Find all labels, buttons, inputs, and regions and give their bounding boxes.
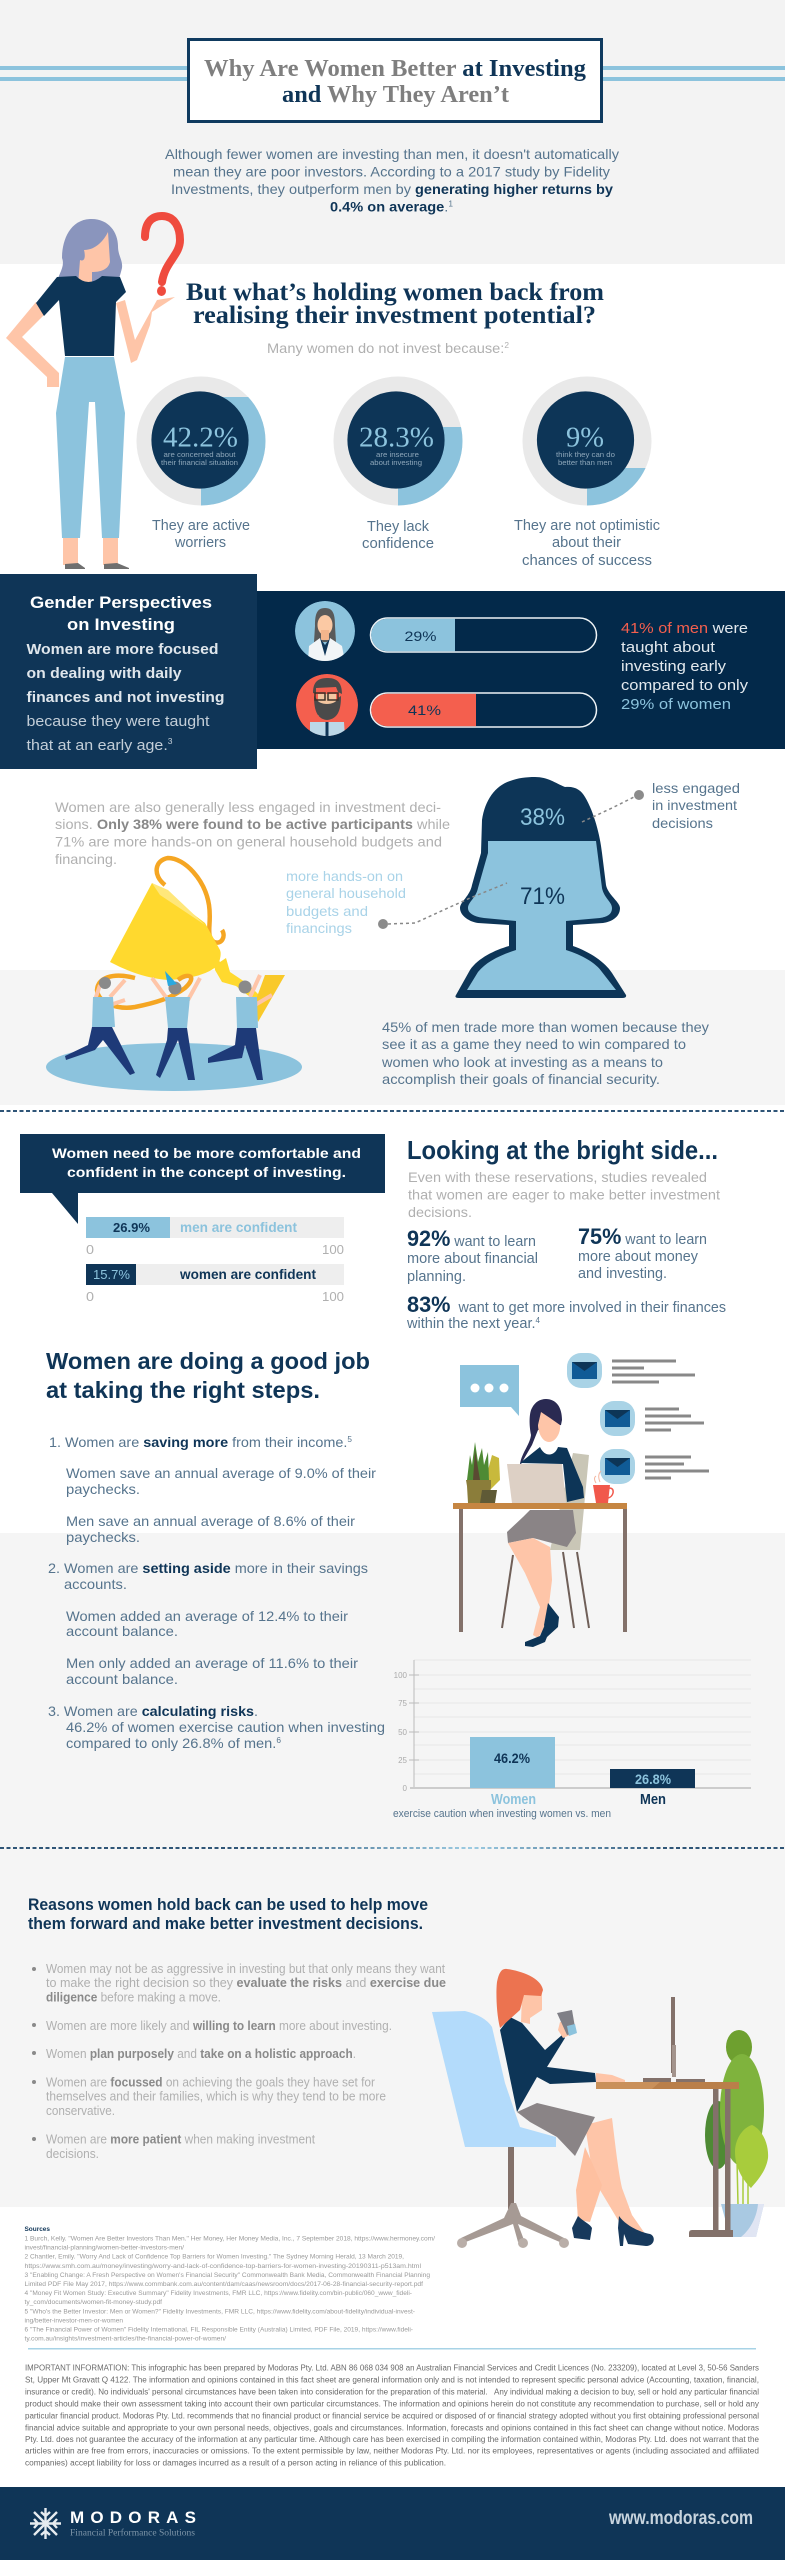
sources: 5 "Who's the Better Investor: Men or Women?" Fidelity Investments, FMR LLC, https://www.fidelity.com/about-fidelity/individual-invest- bbox=[24, 2308, 415, 2316]
important information: insurance or credit). No individuals' personal circumstances have been taken into consideration for the preparation of this material. Any individual making a decision to buy, sell or hold any particular financial bbox=[25, 2388, 759, 2396]
illustration: people carrying trophy bbox=[46, 858, 302, 1091]
bullet list: Women are more patient when making investment bbox=[46, 2132, 315, 2146]
donut: 28.3%: 28.3% bbox=[359, 422, 434, 454]
bullet list: conservative. bbox=[46, 2103, 115, 2118]
sources: Sources bbox=[24, 2226, 50, 2233]
text: men trade more: see it as a game they need to win compared to bbox=[382, 1036, 686, 1052]
text box: 3 bbox=[168, 737, 173, 746]
donut: 9% bbox=[522, 376, 652, 506]
step 1: paychecks. bbox=[66, 1481, 140, 1497]
callout: more hands-on: budgets and bbox=[286, 903, 368, 919]
shirt bbox=[36, 276, 126, 356]
donut: 28.3%: are insecure bbox=[376, 450, 419, 459]
decorative title rules bbox=[0, 66, 785, 81]
text box: finances and not investing bbox=[26, 689, 224, 706]
trousers bbox=[56, 357, 125, 538]
chart: exercise caution bbox=[393, 1660, 751, 1820]
donut: 28.3% bbox=[334, 376, 462, 506]
text: men trade more bbox=[381, 1019, 709, 1087]
intro paragraph: mean they are poor investors. According to a 2017 study by Fidelity bbox=[173, 164, 610, 180]
step 2: account balance. bbox=[66, 1623, 178, 1639]
intro paragraph bbox=[165, 146, 619, 214]
step 2: Women added an average of 12.4% to their bbox=[66, 1608, 348, 1624]
text box bbox=[0, 574, 257, 769]
callout: more hands-on: more hands-on on bbox=[286, 868, 403, 884]
intro paragraph: 0.4% on average . bbox=[330, 198, 448, 214]
step 1: paychecks. bbox=[66, 1529, 140, 1545]
face bbox=[78, 232, 110, 289]
step 1: 1. Women are saving more from their income. bbox=[49, 1434, 344, 1450]
callout bbox=[20, 1134, 385, 1224]
heading: But what’s holding women back from bbox=[186, 279, 604, 306]
chart: exercise caution: 25 bbox=[398, 1756, 408, 1765]
sources: 4 "Money Fit Women Study: Executive Summary" Fidelity Investments, FMR LLC, https://www.fidelity.com/bin-public/060_www_fideli- bbox=[24, 2290, 412, 2297]
chart: head silhouette: 71% bbox=[520, 883, 565, 910]
laptop bbox=[507, 1464, 566, 1503]
monitor bbox=[643, 1997, 705, 2082]
stat: 92%: more about financial bbox=[407, 1251, 538, 1267]
desk bbox=[453, 1503, 627, 1632]
important information: IMPORTANT INFORMATION: This infographic has been prepared by Modoras Pty. Ltd. ABN 86 068 034 908 an Australian Financial Services and Credit Licences (No. 233209), located at Level 3, 50-56 Sanders bbox=[25, 2364, 759, 2372]
icon: Modoras logo mark bbox=[30, 2508, 61, 2539]
text box: Women are more focused bbox=[26, 641, 218, 658]
stat: 92% bbox=[407, 1226, 538, 1285]
chart: exercise caution: 0 bbox=[403, 1784, 408, 1793]
woman figure bbox=[507, 1399, 584, 1647]
chart: head silhouette bbox=[455, 777, 626, 998]
paragraph: financing. bbox=[55, 851, 117, 867]
callout text: compared to only bbox=[621, 677, 749, 694]
caption: not optimistic: chances of success bbox=[522, 552, 652, 569]
bar: women are confident: 100 bbox=[322, 1289, 344, 1304]
shoes bbox=[65, 563, 129, 569]
sources: https://www.smh.com.au/money/investing/worry-and-lack-of-confidence-top-barriers-for-women-investing-20190311-p513am.html bbox=[24, 2263, 422, 2270]
stat: 83% bbox=[406, 1292, 726, 1332]
legs bbox=[63, 535, 118, 565]
icon: man avatar bbox=[296, 674, 358, 737]
important information: financial advice suitable and appropriate to your own personal needs, objectives, goals and circumstances. Information, forecasts and opinions contained in this fact sheet can change without notice. Modoras bbox=[25, 2424, 759, 2432]
paragraph: Women are also generally less engaged in investment deci- bbox=[55, 799, 441, 815]
bullet list: diligence before making a move. bbox=[46, 1990, 221, 2004]
bullet list: Women may not be as aggressive in investing but that only means they want bbox=[46, 1961, 445, 1976]
subheading: 2 bbox=[504, 341, 510, 350]
heading: Women are doing a good job bbox=[46, 1348, 370, 1374]
stat: 75%: more about money bbox=[578, 1249, 699, 1265]
title box: Why Are Women Better at Investing bbox=[204, 56, 586, 82]
paragraph: 71% are more hands-on on general household budgets and bbox=[55, 834, 442, 850]
chart: exercise caution: 50 bbox=[398, 1728, 408, 1737]
icon: email two bbox=[600, 1401, 704, 1436]
intro paragraph: Although fewer women are investing than men, it doesn't automatically bbox=[165, 146, 619, 162]
bar: men: Men bbox=[640, 1791, 666, 1808]
hair bbox=[57, 219, 122, 286]
figure bbox=[496, 1969, 654, 2246]
panel: reasons women hold back bbox=[28, 1896, 446, 2161]
bullet list: themselves and their families, which is why they tend to be more bbox=[46, 2088, 386, 2104]
sources: ty_com/documents/women-fit-money-study.pdf bbox=[24, 2299, 162, 2306]
intro text: decisions. bbox=[408, 1204, 472, 1220]
step 1: 5 bbox=[347, 1435, 353, 1444]
bullet list: Women are focussed on achieving the goals they have set for bbox=[46, 2074, 376, 2090]
step 2: account balance. bbox=[66, 1671, 178, 1687]
heading: them forward and make better investment decisions. bbox=[28, 1915, 423, 1933]
bar: women are confident: 15.7% bbox=[93, 1267, 130, 1282]
progress bar: women 29% bbox=[370, 618, 596, 652]
stat: 75%: 75% want to learn bbox=[578, 1224, 707, 1249]
sources: Limited PDF File May 2017, https://www.commbank.com.au/content/dam/caas/newsroom/docs/2017-06-28-financial-security-report.pdf bbox=[24, 2281, 423, 2288]
donut: 42.2%: their financial situation bbox=[161, 458, 238, 467]
text box: Gender Perspectives bbox=[30, 593, 212, 612]
step 2: 2. Women are setting aside more in their savings bbox=[48, 1560, 368, 1576]
important information: Pty. Ltd. does not guarantee the accuracy of the information at any particular time. Although care has been exercised in compiling the information contained within, Modoras Pty. Ltd. does not warrant that the bbox=[25, 2435, 759, 2444]
bullet list: to make the right decision so they evaluate the risks and exercise due bbox=[46, 1975, 446, 1990]
bullet list bbox=[32, 1961, 446, 2161]
donut: 9%: better than men bbox=[558, 458, 612, 467]
panel: confidence bbox=[20, 1134, 385, 1304]
icon: woman avatar bbox=[295, 601, 355, 662]
bar: women are confident: women are confident bbox=[179, 1266, 316, 1282]
text box: that at an early age. bbox=[26, 737, 159, 754]
text: men trade more: accomplish their goals of financial security. bbox=[382, 1071, 660, 1087]
text box: on Investing bbox=[67, 615, 175, 634]
website: www.modoras.com bbox=[608, 2508, 753, 2529]
panel: right steps bbox=[46, 1348, 385, 1751]
important information: particular financial product. Modoras Pty. Ltd. recommends that no financial product or financial service be acquired or disposed of or financial strategy adopted without you first obtaining professional personal bbox=[25, 2412, 759, 2420]
important information bbox=[25, 2364, 759, 2468]
caption: active worriers bbox=[152, 517, 250, 551]
important information: St, Upper Mt Gravatt Q 4122. The information and opinions contained in this fact sheet are general information only and is not intended to represent specific personal advice (Accounting, taxation, financial, bbox=[25, 2376, 759, 2384]
icon: email three bbox=[600, 1449, 709, 1484]
text box: on dealing with daily bbox=[26, 665, 182, 682]
callout: less engaged: decisions bbox=[652, 815, 713, 831]
bar: women are confident bbox=[86, 1264, 344, 1304]
sources: ing/better-investor-men-or-women bbox=[24, 2318, 123, 2324]
subheading: Many women do not invest because: bbox=[267, 340, 494, 356]
bar: men: 26.8% bbox=[635, 1771, 671, 1787]
panel: engagement bbox=[46, 777, 740, 1091]
intro text bbox=[408, 1169, 720, 1220]
caption: lack confidence: confidence bbox=[362, 535, 434, 552]
heading: Reasons women hold back can be used to help move bbox=[28, 1896, 428, 1914]
heading bbox=[28, 1896, 428, 1933]
chair bbox=[502, 1453, 589, 1628]
callout text: 41% of men were bbox=[621, 620, 748, 637]
bullet list: Women plan purposely and take on a holistic approach. bbox=[46, 2046, 356, 2061]
figure two bbox=[152, 971, 200, 1080]
stat: 83%: 83% want to get more involved in their finances bbox=[407, 1292, 726, 1317]
callout: less engaged: in investment bbox=[652, 797, 737, 813]
bar: women are confident: 0 bbox=[86, 1289, 94, 1304]
desk bbox=[596, 2082, 739, 2237]
sources: 2 Chantler, Emily. "Worry And Lack of Confidence Top Barriers for Women Investing." The Sydney Morning Herald, 13 March 2019, bbox=[24, 2254, 404, 2260]
step 3: 6 bbox=[276, 1736, 282, 1745]
donut: 42.2%: 42.2% bbox=[163, 422, 238, 454]
figure one bbox=[65, 977, 135, 1075]
progress bar: women 29%: 29% bbox=[404, 628, 436, 644]
bar: men bbox=[610, 1769, 695, 1808]
heading: at taking the right steps. bbox=[46, 1377, 320, 1403]
bar: men are confident: 0 bbox=[86, 1242, 94, 1257]
donut: 42.2% bbox=[136, 376, 266, 506]
bar: men are confident: men are confident bbox=[180, 1219, 297, 1235]
callout: confident in the concept of investing. bbox=[67, 1164, 346, 1180]
icon: email one bbox=[567, 1353, 695, 1388]
chart: exercise caution: 75 bbox=[398, 1699, 408, 1708]
step 1 bbox=[49, 1434, 376, 1545]
callout text: 29% of women bbox=[621, 696, 731, 713]
stat: 92%: 92% want to learn bbox=[407, 1226, 536, 1251]
caption: active worriers: worriers bbox=[174, 534, 226, 551]
text: men trade more: 45% of men trade more than women because they bbox=[382, 1019, 709, 1035]
intro paragraph: 1 bbox=[448, 200, 454, 208]
donut: 9%: think they can do bbox=[556, 450, 615, 459]
callout: Women need to be more comfortable and bbox=[52, 1145, 361, 1161]
illustration: woman with question mark bbox=[6, 216, 180, 569]
donut: 9%: 9% bbox=[566, 422, 604, 454]
callout: more hands-on bbox=[286, 868, 507, 936]
donut: 28.3%: about investing bbox=[370, 458, 422, 467]
bullet list: Women are more likely and willing to learn more about investing. bbox=[46, 2018, 392, 2033]
heading: realising their investment potential? bbox=[193, 302, 596, 329]
caption: active worriers: They are active bbox=[152, 517, 250, 534]
logo tagline: Financial Performance Solutions bbox=[70, 2528, 195, 2538]
step 2 bbox=[48, 1560, 368, 1687]
panel: gender perspectives bbox=[0, 574, 785, 769]
callout: more hands-on: general household bbox=[286, 885, 406, 901]
bar: men are confident: 26.9% bbox=[113, 1220, 150, 1235]
left arm bbox=[6, 302, 59, 387]
important information: product should make their own assessment taking into account their own particular circumstances. The information and opinions herein do not constitute any recommendation to purchase, sell or hold any bbox=[25, 2400, 759, 2408]
step 2: accounts. bbox=[64, 1576, 127, 1592]
title box bbox=[188, 40, 602, 122]
step 2: Men only added an average of 11.6% to their bbox=[66, 1655, 358, 1671]
sources: invest/financial-planning/women-better-investors-men/ bbox=[24, 2244, 184, 2252]
plant bbox=[466, 1442, 500, 1503]
step 3 bbox=[48, 1703, 385, 1751]
bar: men are confident: 100 bbox=[322, 1242, 344, 1257]
step 1: Men save an annual average of 8.6% of their bbox=[66, 1513, 355, 1529]
step 3: 3. Women are calculating risks. bbox=[48, 1703, 258, 1719]
sources bbox=[24, 2226, 435, 2342]
important information: companies) accept liability for loss or damages incurred as a result of a person acting in reliance of this publication. bbox=[25, 2458, 446, 2468]
title box: and Why They Aren’t bbox=[282, 82, 509, 108]
icon: red question mark bbox=[145, 216, 180, 296]
text box: because they were taught bbox=[26, 713, 210, 730]
stat: 92%: planning. bbox=[407, 1269, 466, 1285]
callout: less engaged: less engaged bbox=[652, 780, 740, 796]
plant bbox=[705, 2030, 768, 2237]
panel: header bbox=[0, 40, 785, 214]
stat: 83%: 4 bbox=[536, 1316, 541, 1325]
callout text: investing early bbox=[621, 658, 727, 675]
sources: ty.com.au/insights/investment-articles/the-financial-power-of-women/ bbox=[24, 2336, 226, 2342]
stat: 75%: and investing. bbox=[578, 1266, 667, 1282]
heading bbox=[186, 279, 604, 329]
panel: what's holding women back bbox=[136, 279, 660, 569]
illustration: woman in chair with phone bbox=[432, 1969, 768, 2248]
callout: less engaged bbox=[582, 780, 740, 831]
coffee mug bbox=[593, 1471, 613, 1503]
intro text: Even with these reservations, studies revealed bbox=[408, 1169, 707, 1185]
chair bbox=[432, 2011, 569, 2248]
caption: not optimistic bbox=[514, 517, 660, 569]
heading: Looking at the bright side... bbox=[407, 1135, 718, 1165]
chart caption: exercise caution when investing women vs. men bbox=[393, 1808, 611, 1820]
callout text: taught about bbox=[621, 639, 716, 656]
sources: 1 Burch, Kelly. "Women Are Better Investors Than Men." Her Money, Her Money Media, Inc., 7 September 2018, https://www.hermoney.com/ bbox=[24, 2236, 435, 2242]
callout text bbox=[621, 620, 749, 713]
panel: bright side bbox=[406, 1135, 726, 1332]
paragraph: sions. Only 38% were found to be active participants while bbox=[55, 816, 450, 832]
chart: head silhouette: 38% bbox=[520, 804, 565, 831]
heading bbox=[46, 1348, 370, 1403]
step 3: compared to only 26.8% of men. bbox=[66, 1735, 268, 1751]
caption: lack confidence bbox=[362, 518, 434, 552]
caption: lack confidence: They lack bbox=[367, 518, 429, 535]
progress bar: men 41% bbox=[370, 693, 596, 727]
progress bar: men 41%: 41% bbox=[408, 702, 441, 718]
bullet list: decisions. bbox=[46, 2146, 99, 2161]
bar: women: Women bbox=[491, 1791, 536, 1808]
dark band bbox=[257, 591, 785, 749]
stat: 83%: within the next year. bbox=[407, 1316, 535, 1332]
important information: articles within are free from errors, inaccuracies or omissions. To the extent permissible by law, neither Modoras Pty. Ltd. nor its employees, representatives or agents (including associated and affiliated bbox=[25, 2446, 759, 2456]
bar: women: 46.2% bbox=[494, 1750, 530, 1766]
figure three bbox=[208, 975, 272, 1080]
text: men trade more: women who look at investing as a means to bbox=[381, 1054, 663, 1070]
donut: 42.2%: are concerned about bbox=[164, 450, 236, 459]
paragraph bbox=[55, 799, 450, 867]
caption: not optimistic: They are not optimistic bbox=[514, 517, 660, 534]
icon: speech bubble bbox=[460, 1365, 519, 1416]
logo wordmark: MODORAS bbox=[70, 2508, 196, 2527]
callout: more hands-on: financings bbox=[286, 920, 352, 936]
bar: men are confident bbox=[86, 1217, 344, 1257]
intro paragraph: Investments, they outperform men by generating higher returns by bbox=[171, 181, 613, 197]
chart: exercise caution: 100 bbox=[394, 1671, 408, 1680]
illustration: woman at desk bbox=[453, 1353, 709, 1647]
stat: 75% bbox=[578, 1224, 707, 1282]
bar: women bbox=[470, 1737, 555, 1808]
sources: 6 "The Financial Power of Women" Fidelity International, FIL Responsible Entity (Australia) Limited, PDF File, 2019, https://www.fideli- bbox=[24, 2326, 413, 2334]
step 1: Women save an annual average of 9.0% of their bbox=[66, 1465, 376, 1481]
sources: 3 "Enabling Change: A Fresh Perspective on Women's Financial Security" Commonwealth Bank Media, Commonwealth Financial Planning bbox=[24, 2272, 430, 2279]
intro text: that women are eager to make better investment bbox=[408, 1186, 720, 1202]
step 3: 46.2% of women exercise caution when investing bbox=[66, 1719, 385, 1735]
caption: not optimistic: about their bbox=[552, 534, 621, 551]
panel: footer bbox=[0, 2487, 785, 2560]
right arm bbox=[116, 297, 175, 363]
